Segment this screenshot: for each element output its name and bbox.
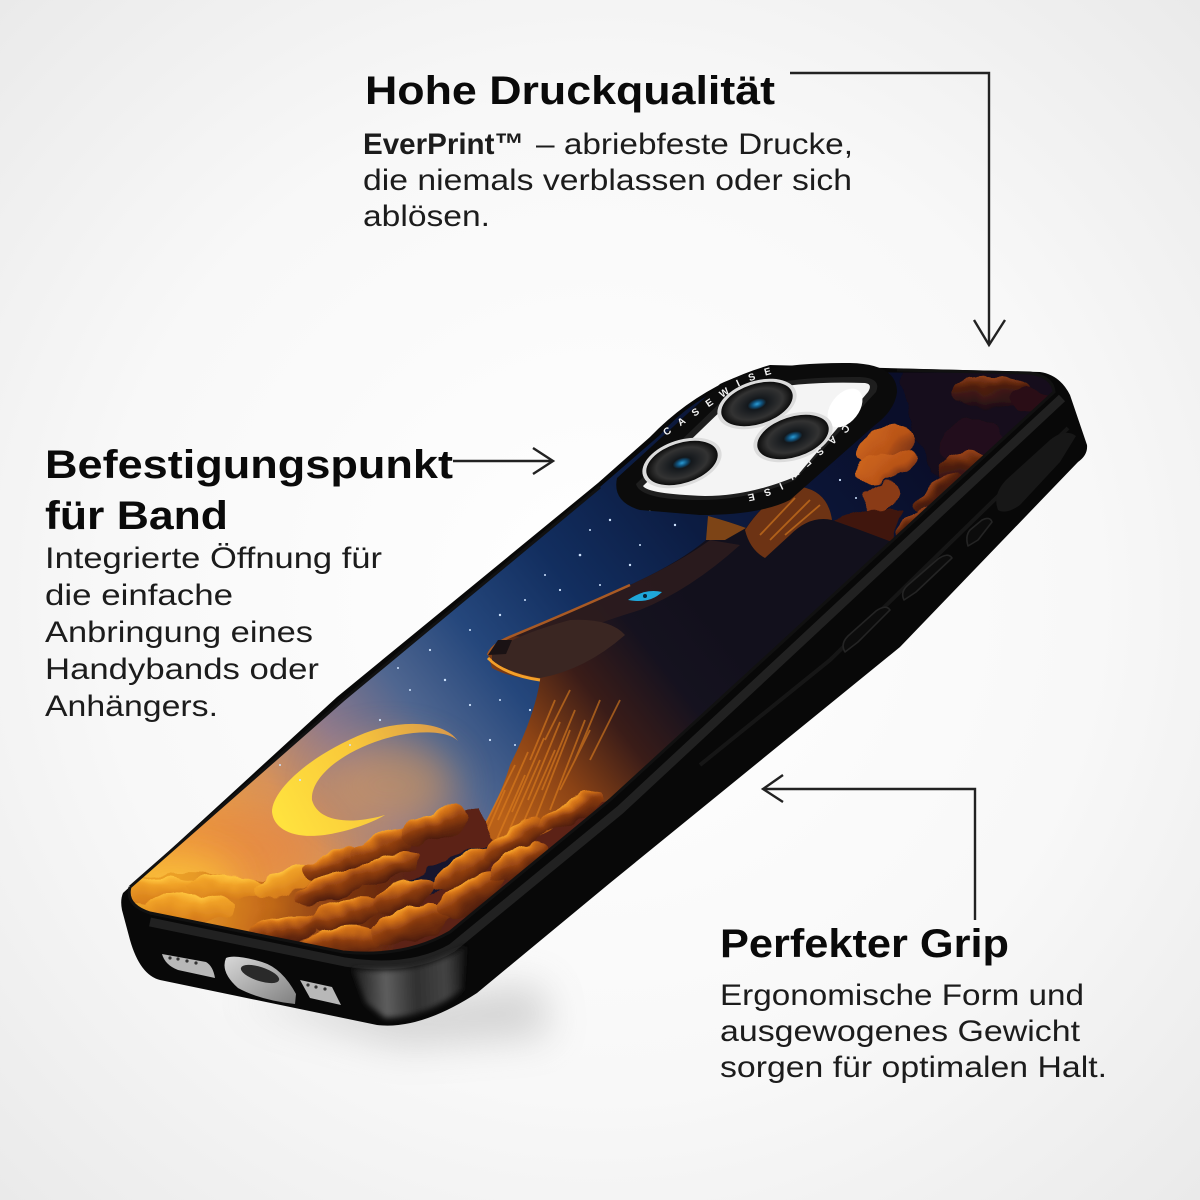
camera bumper: [616, 363, 897, 515]
lens top: [711, 369, 803, 439]
left speaker: [162, 954, 215, 978]
right speaker: [300, 980, 341, 1005]
wolf muzzle rim: [488, 585, 630, 655]
lens right: [747, 402, 839, 472]
phone case illustration: [121, 363, 1088, 1026]
stars: [279, 478, 857, 782]
back ridge: [254, 864, 312, 899]
body text: – abriebfeste Drucke,: [536, 128, 853, 161]
body text: sorgen für optimalen Halt.: [720, 1051, 1107, 1084]
heading: Befestigungspunkt: [45, 443, 453, 487]
heading: Perfekter Grip: [720, 922, 1009, 966]
side buttons: [843, 433, 1076, 652]
body text: [45, 542, 382, 723]
lower clouds: [130, 790, 608, 952]
body text: Anhängers.: [45, 690, 218, 723]
brand text: CASEWISE: [664, 367, 772, 435]
body text: Anbringung eines: [45, 616, 313, 649]
body text: die einfache: [45, 579, 233, 612]
navy gap: [408, 846, 488, 895]
side ridge: [700, 428, 1068, 765]
phone shadow: [240, 985, 550, 1045]
side rim highlight: [150, 398, 1062, 965]
arrow: print quality: [790, 73, 1005, 345]
callout: Befestigungspunkt: [45, 443, 453, 723]
wolf: [486, 488, 890, 840]
arrow: strap attachment: [453, 448, 553, 474]
top right dark clouds: [834, 372, 1052, 541]
front ridge: [249, 916, 316, 942]
sky: [144, 372, 940, 882]
body text: EverPrint™: [363, 128, 524, 161]
artwork: [130, 372, 1052, 952]
body text: Ergonomische Form und: [720, 979, 1084, 1012]
wolf eye: [628, 591, 662, 601]
callout: Perfekter Grip: [720, 922, 1107, 1084]
heading: Hohe Druckqualität: [365, 69, 775, 113]
body text: ausgewogenes Gewicht: [720, 1015, 1081, 1048]
cloud base: [135, 799, 608, 952]
body text: [720, 979, 1107, 1084]
phone body: [121, 365, 1087, 1026]
yellow haze clouds: [131, 876, 193, 905]
charging port and speakers: [162, 954, 341, 1005]
sky glow: [164, 806, 312, 882]
body text: Handybands oder: [45, 653, 319, 686]
heading: für Band: [45, 494, 228, 538]
wolf muzzle: [492, 620, 625, 678]
body text: [363, 128, 853, 233]
body text: Integrierte Öffnung für: [45, 542, 382, 575]
body text: ablösen.: [363, 200, 490, 233]
usb port: [224, 957, 296, 1004]
arrow: grip: [763, 775, 975, 920]
moon: [272, 724, 458, 836]
lens left: [636, 428, 728, 498]
body text: die niemals verblassen oder sich: [363, 164, 852, 197]
mane fur: [475, 498, 820, 860]
camera plate: [643, 383, 870, 496]
callout: Hohe Druckqualität: [363, 69, 853, 233]
wolf ear fur: [745, 487, 832, 558]
heading: [45, 443, 453, 538]
bottom corner highlight: [352, 945, 466, 1018]
screen rim: [129, 370, 1054, 953]
wolf head top: [512, 540, 740, 640]
bumper frame: [616, 363, 897, 515]
camera bumper: CASEWISE: [748, 426, 850, 502]
